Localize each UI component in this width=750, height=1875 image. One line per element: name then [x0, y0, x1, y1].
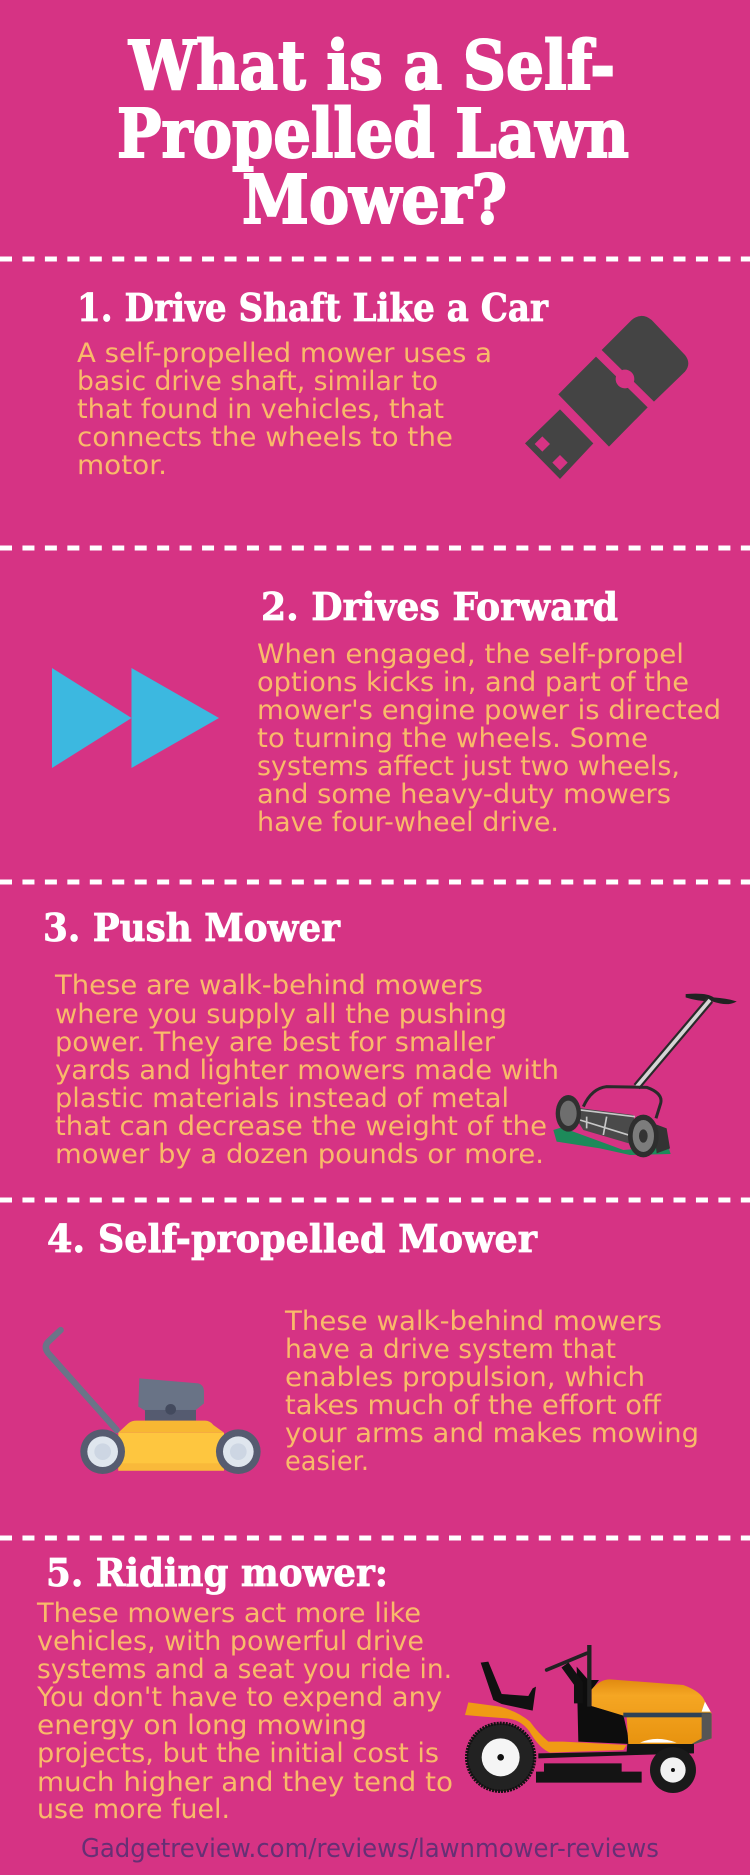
text block: section 4: enables propulsion, which [285, 1362, 645, 1393]
footer source: Gadgetreview.com/reviews/lawnmower-reviews [81, 1834, 659, 1864]
text block: section 3: These are walk-behind mowers [54, 970, 483, 1001]
text block: section 4 [284, 1306, 699, 1477]
text block: section 4: have a drive system that [285, 1334, 616, 1365]
panel: self-propelled mower [46, 1216, 699, 1477]
icon: fast-forward arrows [52, 668, 219, 768]
heading: section 5: 5. Riding mower: [46, 1550, 388, 1595]
panel: drives forward [52, 584, 721, 838]
text block: section 1: basic drive shaft, similar to [77, 366, 438, 397]
text block: section 2: systems affect just two wheels, [257, 751, 680, 782]
heading: section 3: 3. Push Mower [43, 905, 341, 950]
heading: section 4: 4. Self-propelled Mower [47, 1216, 538, 1261]
text block: section 5: use more fuel. [37, 1794, 230, 1825]
panel: drive shaft [77, 285, 688, 481]
text block: section 5: systems and a seat you ride in. [37, 1654, 452, 1685]
title: Propelled Lawn [117, 94, 629, 173]
icon: reel push mower [553, 995, 734, 1157]
text block: section 3: mower by a dozen pounds or more. [55, 1139, 544, 1170]
text block: section 3: power. They are best for smaller [55, 1027, 496, 1058]
text block: section 4: easier. [285, 1446, 369, 1477]
title: Mower? [242, 160, 507, 239]
icon: self-propelled mower [46, 1330, 261, 1474]
text block: section 3 [54, 970, 559, 1170]
text block: section 5: projects, but the initial cost is [37, 1738, 439, 1769]
text block: section 4: your arms and makes mowing [285, 1418, 699, 1449]
text block: section 2 [257, 639, 721, 838]
heading: section 2: 2. Drives Forward [261, 584, 618, 629]
icon: riding mower [465, 1645, 712, 1793]
text block: section 5: vehicles, with powerful drive [37, 1626, 424, 1657]
panel: push mower [43, 905, 734, 1170]
panel: riding mower [36, 1550, 712, 1825]
text block: section 5 [36, 1598, 453, 1825]
text block: section 2: to turning the wheels. Some [257, 723, 648, 754]
text block: section 5: You don't have to expend any [36, 1682, 442, 1713]
heading: section 1: 1. Drive Shaft Like a Car [77, 285, 549, 330]
text block: section 3: plastic materials instead of metal [55, 1083, 509, 1114]
text block: section 2: When engaged, the self-propel [257, 639, 684, 670]
text block: section 1 [77, 338, 492, 481]
text block: section 1: motor. [77, 450, 167, 481]
text block: section 4: These walk-behind mowers [284, 1306, 662, 1337]
text block: section 5: much higher and they tend to [37, 1767, 453, 1798]
title [117, 26, 629, 239]
icon: drive shaft [525, 316, 688, 479]
text block: section 2: mower's engine power is directed [257, 695, 721, 726]
text block: section 5: energy on long mowing [37, 1710, 367, 1741]
text block: section 2: have four-wheel drive. [257, 807, 559, 838]
text block: section 1: A self-propelled mower uses a [77, 338, 492, 369]
text block: section 3: yards and lighter mowers made with [55, 1055, 559, 1086]
title: What is a Self- [128, 26, 615, 105]
text block: section 5: These mowers act more like [36, 1598, 421, 1629]
text block: section 2: options kicks in, and part of the [257, 667, 689, 698]
text block: section 1: connects the wheels to the [77, 422, 453, 453]
text block: section 2: and some heavy-duty mowers [257, 779, 671, 810]
text block: section 3: where you supply all the pushing [55, 999, 507, 1030]
text block: section 1: that found in vehicles, that [77, 394, 444, 425]
text block: section 4: takes much of the effort off [285, 1390, 662, 1421]
text block: section 3: that can decrease the weight of the [55, 1111, 547, 1142]
